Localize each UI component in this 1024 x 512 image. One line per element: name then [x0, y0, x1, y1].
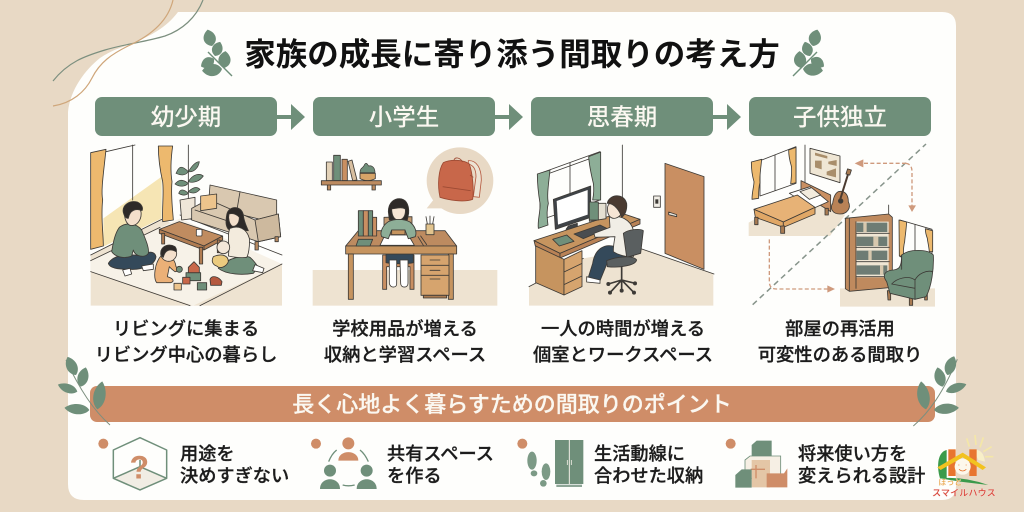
point 2: shared space — [311, 437, 494, 489]
illustration: teen in private room — [529, 145, 714, 306]
illustration: child studying at desk — [313, 147, 497, 306]
bedroom window — [751, 147, 796, 199]
stage header: 子供独立 — [749, 97, 931, 136]
arrow heads — [827, 159, 916, 293]
logo: ほっとスマイルハウス: ほっと — [938, 478, 962, 487]
caption: 思春期: 一人の時間が増える — [541, 318, 705, 339]
caption: 小学生: 学校用品が増える — [332, 318, 478, 339]
arrow 2 — [495, 104, 523, 130]
point 3: storage along daily routes — [517, 439, 703, 487]
coffee table — [159, 222, 223, 264]
point 1: flexible use: 決めすぎない — [180, 466, 289, 486]
caption: 幼少期: リビング中心の暮らし — [95, 344, 277, 365]
banner: points heading: 長く心地よく暮らすための間取りのポイント — [292, 392, 732, 417]
stage header: 幼少期: 幼少期 — [151, 104, 221, 130]
point 2: shared space: を作る — [387, 466, 442, 486]
arrow 3 — [713, 104, 741, 130]
window with curtains — [537, 152, 601, 228]
point 3: storage along daily routes: 合わせた収納 — [594, 466, 703, 486]
poster — [810, 148, 840, 183]
child's upper body — [381, 199, 416, 239]
caption: 子供独立: 可変性のある間取り — [758, 344, 922, 365]
banner: points heading — [90, 386, 935, 422]
icon: left banner branch — [56, 355, 110, 425]
point 4: adaptable design: 将来使い方を — [798, 444, 907, 464]
caption: 子供独立 — [758, 318, 922, 365]
illustration: living room family — [91, 145, 282, 306]
stage header: 幼少期 — [95, 97, 277, 136]
point 2: shared space: 共有スペース — [387, 444, 494, 464]
decorative curves — [53, 0, 203, 106]
point 3: storage along daily routes: 生活動線に — [594, 444, 685, 464]
caption: 幼少期: リビングに集まる — [113, 318, 259, 339]
father — [108, 202, 156, 276]
logo: ほっとスマイルハウス — [932, 435, 996, 498]
guitar — [831, 169, 851, 214]
desk — [534, 202, 640, 295]
stage header: 思春期: 思春期 — [587, 104, 657, 130]
caption: 思春期 — [533, 318, 713, 365]
point 1: flexible use: 用途を — [180, 444, 235, 464]
teen and chair — [587, 196, 643, 295]
monitor — [553, 186, 591, 232]
child's chair and legs — [383, 217, 414, 289]
icon: left title sprig — [198, 28, 232, 77]
plant — [175, 145, 203, 220]
caption: 小学生: 収納と学習スペース — [324, 344, 486, 365]
armchair room window — [899, 220, 933, 260]
blocks — [174, 262, 222, 290]
icon: question cube — [98, 438, 167, 490]
point 4: adaptable design — [726, 439, 925, 488]
illustration: repurposed rooms with dashed divider — [749, 144, 935, 307]
bookshelf — [845, 205, 892, 291]
armchair — [884, 250, 933, 305]
mother and baby — [212, 207, 264, 274]
toddler — [155, 245, 178, 283]
bed — [754, 181, 831, 233]
stage header: 子供独立: 子供独立 — [793, 104, 887, 130]
sofa — [192, 185, 281, 250]
stage header: 思春期 — [531, 97, 713, 136]
title: 家族の成長に寄り添う間取りの考え方 — [244, 36, 780, 72]
icon: three people — [311, 437, 377, 489]
arrow 1 — [277, 104, 305, 130]
icon: question cube: ? — [130, 450, 149, 486]
icon: right title sprig — [793, 28, 827, 77]
caption: 子供独立: 部屋の再活用 — [785, 318, 895, 339]
icon: right banner branch — [913, 354, 968, 426]
door and switch — [654, 163, 704, 269]
icon: stacked boxes — [726, 439, 787, 488]
dashed diagonal divider — [753, 144, 926, 305]
stage header: 小学生: 小学生 — [369, 104, 439, 130]
desk — [346, 211, 457, 299]
wall shelf — [321, 155, 381, 190]
caption: 小学生 — [324, 318, 486, 365]
caption: 幼少期 — [95, 318, 277, 365]
point 1: flexible use — [98, 438, 289, 490]
caption: 思春期: 個室とワークスペース — [533, 344, 713, 365]
point 4: adaptable design: 変えられる設計 — [798, 466, 925, 486]
speech bubble with school bag — [427, 147, 493, 214]
icon: wardrobe and footprints — [517, 439, 583, 487]
stage header: 小学生 — [313, 97, 495, 136]
logo: ほっとスマイルハウス: スマイルハウス — [932, 488, 996, 498]
dashed flow arrows — [769, 163, 912, 289]
